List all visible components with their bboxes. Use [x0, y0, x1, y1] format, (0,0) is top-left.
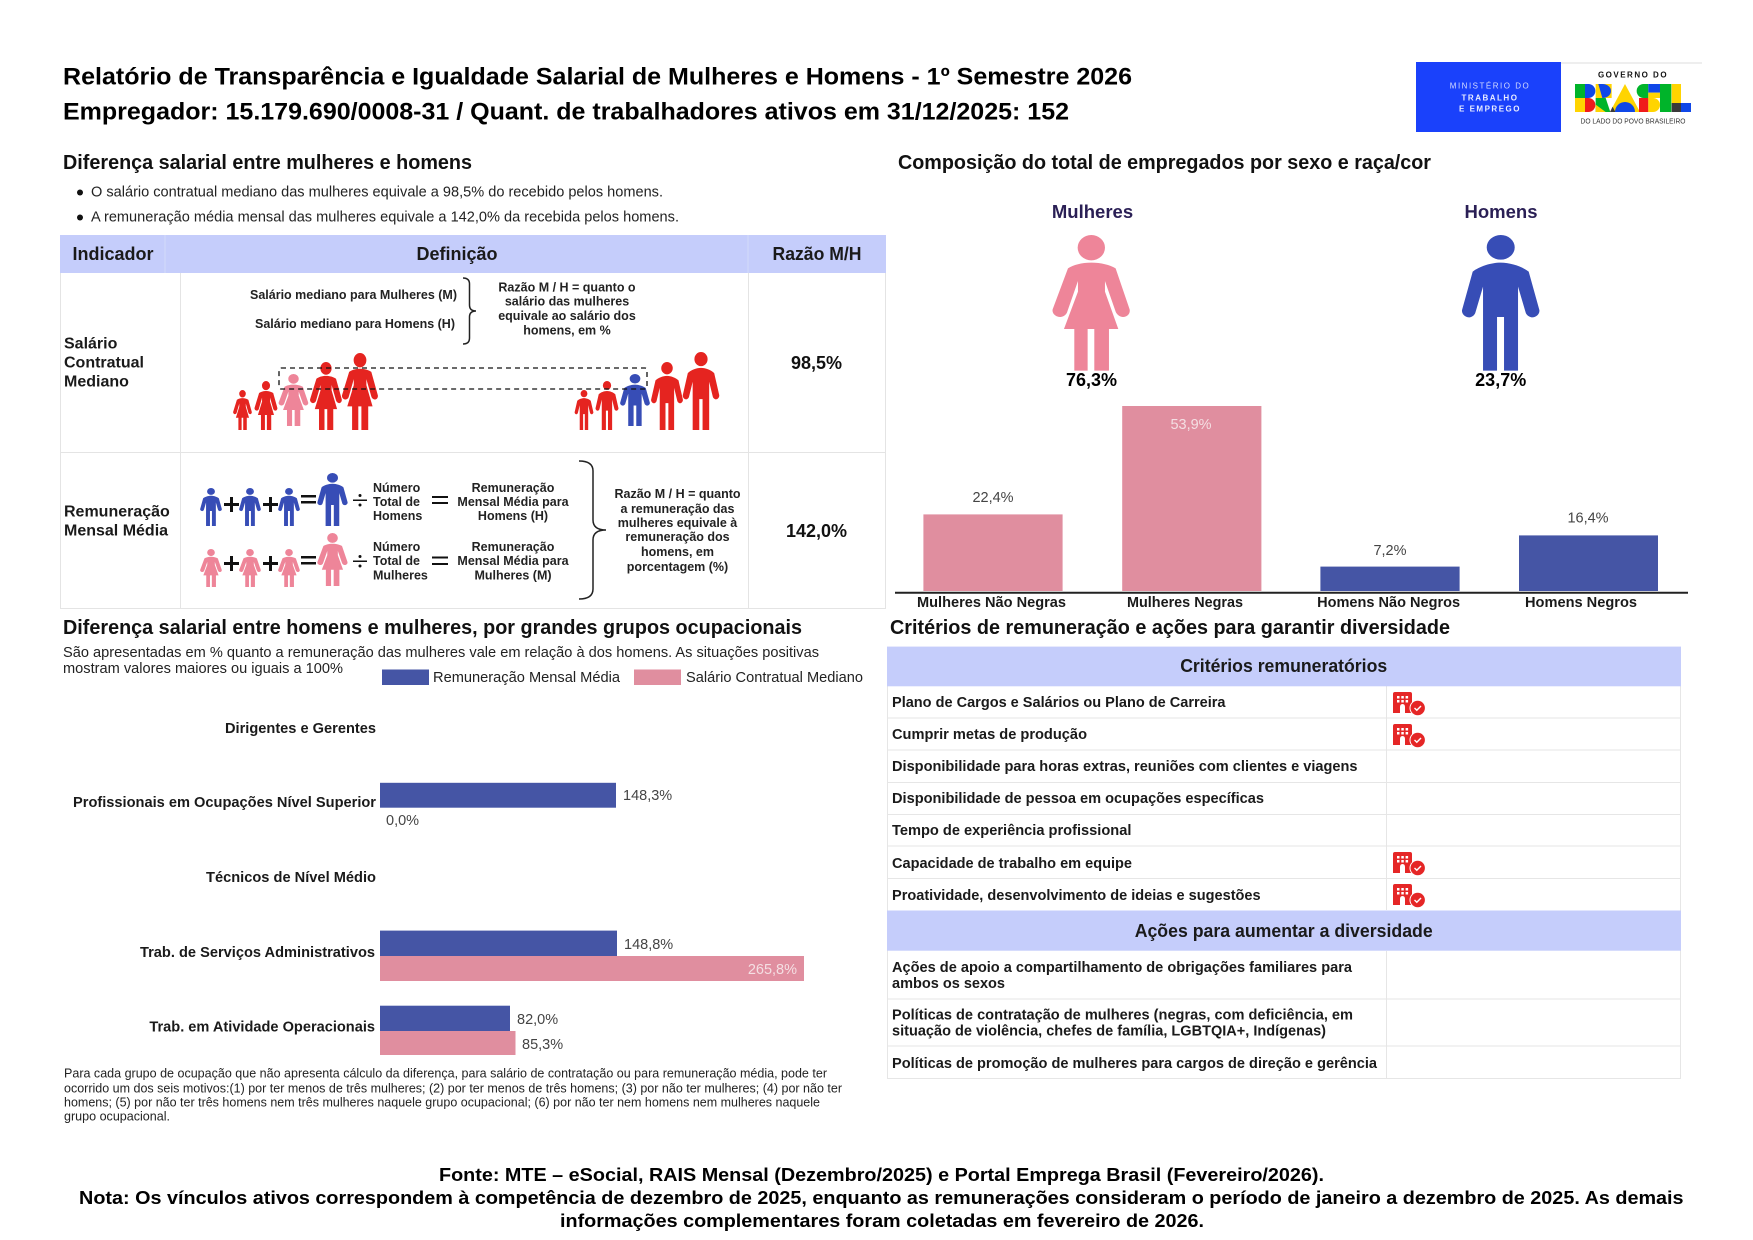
- category: profissionais: [73, 783, 672, 829]
- definition: men's pay formula: Homens: [373, 509, 422, 523]
- heading: occupational groups: Diferença salarial entre homens e mulheres, por grandes grupos ocupacionais: [63, 617, 802, 639]
- criteria rows: Proatividade, desenvolvimento de ideias e sugestões: [892, 888, 1261, 904]
- criteria rows: Disponibilidade de pessoa em ocupações específicas: [892, 791, 1264, 807]
- diversity action rows: Políticas de promoção de mulheres para cargos de direção e gerência: [892, 1056, 1378, 1072]
- criteria rows: Plano de Cargos e Salários ou Plano de Carreira: [892, 695, 1226, 711]
- panel: men share: 23,7%: [1475, 370, 1526, 390]
- definition: men's pay formula: [200, 473, 570, 526]
- brace: formulas to ratio: [579, 461, 606, 599]
- indicator label: salário contratual mediano: [64, 336, 144, 390]
- definition: salário mediano labels: Salário mediano para Homens (H): [255, 317, 455, 331]
- text block: salary summary bullets: [77, 184, 679, 226]
- indicator label: salário contratual mediano: Mediano: [64, 374, 129, 390]
- category: profissionais: Profissionais em Ocupações Nível Superior: [73, 795, 376, 811]
- heading: salary difference: Diferença salarial entre mulheres e homens: [63, 152, 472, 174]
- icon: five women ordered by salary: [233, 353, 378, 430]
- logo: ministry and government: GOVERNO DO: [1598, 70, 1668, 80]
- category: operacionais: 85,3%: [522, 1037, 563, 1053]
- category: operacionais: [149, 1006, 563, 1055]
- legend: [382, 670, 863, 686]
- title: Relatório de Transparência e Igualdade Salarial de Mulheres e Homens - 1º Semestre 2026: [63, 64, 1132, 90]
- panel: women share: 76,3%: [1066, 370, 1117, 390]
- panel: women share: [1052, 201, 1133, 390]
- legend: Salário Contratual Mediano: [686, 670, 863, 686]
- bar chart: occupational groups: [73, 721, 804, 1055]
- diversity action rows: situação de violência, chefes de família, LGBTQIA+, Indígenas): [892, 1023, 1326, 1039]
- value: remuneration ratio: 142,0%: [786, 521, 847, 541]
- definition: women's pay formula: Remuneração: [472, 540, 555, 554]
- text block: salary summary bullets: A remuneração média mensal das mulheres equivale a 142,0% da recebida pelos homens.: [91, 208, 679, 226]
- header: critérios remuneratórios: [887, 647, 1681, 686]
- criteria rows: Capacidade de trabalho em equipe: [892, 856, 1132, 872]
- category: administrativos: 148,8%: [624, 937, 673, 953]
- icon: company check, row 7: [1393, 884, 1426, 908]
- diversity action rows: Políticas de contratação de mulheres (negras, com deficiência, em: [892, 1007, 1353, 1023]
- definition: women's pay formula: Número: [373, 540, 421, 554]
- indicator label: remuneração mensal média: Mensal Média: [64, 522, 168, 540]
- text block: footnote on missing data: homens; (5) por não ter três homens nem três mulheres naquele grupo ocupacional; (6) por não ter nem homens nem mulheres naquele: [64, 1094, 820, 1110]
- text block: chart explanation: mostram valores maiores ou iguais a 100%: [63, 661, 343, 677]
- footer: source and note: Fonte: MTE – eSocial, RAIS Mensal (Dezembro/2025) e Portal Emprega Brasil (Fevereiro/2026).: [439, 1165, 1324, 1185]
- header: ações para aumentar a diversidade: Ações para aumentar a diversidade: [1135, 921, 1433, 941]
- definition: men's pay formula: Número: [373, 481, 421, 495]
- table header: Definição: [416, 244, 498, 264]
- definition: women's pay formula: Mensal Média para: [457, 554, 570, 568]
- table header: [60, 235, 886, 273]
- diversity action rows: Ações de apoio a compartilhamento de obrigações familiares para: [892, 960, 1353, 976]
- definition: razão explanation for remuneration: remuneração dos: [625, 530, 730, 544]
- definition: men's pay formula: Total de: [373, 495, 420, 509]
- indicator label: remuneração mensal média: Remuneração: [64, 504, 170, 520]
- footer: source and note: [79, 1165, 1684, 1231]
- definition: razão explanation for remuneration: a remuneração das: [621, 502, 735, 516]
- category: profissionais: 148,3%: [623, 788, 672, 804]
- definition: women's pay formula: Mulheres: [373, 568, 428, 582]
- category: administrativos: [140, 931, 804, 981]
- panel: indicator table: [60, 235, 886, 608]
- criteria rows: Cumprir metas de produção: [892, 727, 1087, 743]
- bar chart: composition by sex and race: Mulheres Não Negras: [917, 595, 1066, 611]
- title: [63, 64, 1132, 126]
- bar chart: composition by sex and race: 16,4%: [1567, 510, 1609, 526]
- definition: salário mediano labels: [250, 278, 476, 344]
- logo: ministry and government: E EMPREGO: [1459, 104, 1521, 114]
- value: salário ratio: 98,5%: [791, 353, 842, 373]
- panel: men share: [1462, 201, 1539, 390]
- bar chart: composition by sex and race: 53,9%: [1170, 417, 1212, 433]
- text block: footnote on missing data: Para cada grupo de ocupação que não apresenta cálculo da diferença, para salário de contratação ou para remuneração média, pode ter: [64, 1066, 828, 1080]
- table header: Razão M/H: [772, 244, 862, 264]
- bar chart: composition by sex and race: [895, 406, 1688, 611]
- footer: source and note: informações complementares foram coletadas em fevereiro de 2026.: [560, 1211, 1204, 1231]
- icon: five men ordered by salary: [575, 352, 719, 430]
- panel: women share: Mulheres: [1052, 201, 1133, 222]
- category: dirigentes: Dirigentes e Gerentes: [225, 721, 376, 737]
- criteria rows: [892, 695, 1358, 904]
- panel: criteria table: [887, 647, 1681, 1078]
- header: ações para aumentar a diversidade: [887, 910, 1681, 951]
- dashed comparison box: [279, 368, 647, 389]
- header: critérios remuneratórios: Critérios remuneratórios: [1180, 656, 1387, 676]
- indicator label: remuneração mensal média: [64, 504, 170, 540]
- table header: Indicador: [72, 244, 154, 264]
- text block: salary summary bullets: O salário contratual mediano das mulheres equivale a 98,5% do recebido pelos homens.: [91, 184, 663, 200]
- diversity action rows: [892, 960, 1378, 1072]
- text block: footnote on missing data: ocorrido um dos seis motivos:(1) por ter menos de três mulheres; (2) por ter menos de três homens; (3) por não ter mulheres; (4) por não ter: [64, 1080, 843, 1096]
- definition: women's pay formula: Total de: [373, 554, 420, 568]
- definition: razão explanation for remuneration: homens, em: [641, 545, 714, 559]
- logo: ministry and government: DO LADO DO POVO BRASILEIRO: [1580, 118, 1686, 126]
- logo: ministry and government: [1416, 62, 1702, 132]
- text block: chart explanation: São apresentadas em % quanto a remuneração das mulheres vale em relação à dos homens. As situações positivas: [63, 645, 819, 661]
- definition: men's pay formula: Homens (H): [478, 509, 548, 523]
- definition: women's pay formula: [200, 533, 570, 587]
- definition: razão explanation for remuneration: Razão M / H = quanto: [614, 487, 741, 501]
- heading: composition: Composição do total de empregados por sexo e raça/cor: [898, 152, 1431, 174]
- definition: salário mediano labels: Salário mediano para Mulheres (M): [250, 288, 457, 302]
- criteria rows: Disponibilidade para horas extras, reuniões com clientes e viagens: [892, 759, 1358, 775]
- indicator label: salário contratual mediano: Contratual: [64, 354, 144, 372]
- bar chart: composition by sex and race: 22,4%: [972, 490, 1014, 506]
- diversity action rows: ambos os sexos: [892, 976, 1005, 992]
- definition: razão explanation: [498, 280, 636, 338]
- icon: company check, row 2: [1393, 724, 1426, 748]
- definition: razão explanation for remuneration: porcentagem (%): [627, 560, 728, 574]
- text block: footnote on missing data: grupo ocupacional.: [64, 1108, 170, 1124]
- criteria rows: Tempo de experiência profissional: [892, 823, 1131, 839]
- definition: men's pay formula: Mensal Média para: [457, 495, 570, 509]
- definition: razão explanation: homens, em %: [523, 324, 611, 338]
- definition: razão explanation: equivale ao salário dos: [498, 309, 636, 323]
- panel: men share: Homens: [1464, 201, 1538, 222]
- indicator label: salário contratual mediano: Salário: [64, 336, 118, 352]
- category: administrativos: 265,8%: [748, 962, 797, 978]
- heading: criteria: Critérios de remuneração e ações para garantir diversidade: [890, 617, 1450, 639]
- category: administrativos: Trab. de Serviços Administrativos: [140, 945, 375, 961]
- definition: razão explanation: Razão M / H = quanto o: [498, 280, 636, 294]
- bar chart: composition by sex and race: Homens Negros: [1525, 595, 1637, 611]
- definition: women's pay formula: Mulheres (M): [474, 568, 552, 582]
- icon: company check, row 1: [1393, 692, 1426, 716]
- definition: razão explanation: salário das mulheres: [505, 294, 629, 308]
- category: operacionais: Trab. em Atividade Operacionais: [149, 1019, 375, 1035]
- footer: source and note: Nota: Os vínculos ativos correspondem à competência de dezembro de 2025, enquanto as remunerações consideram o período de janeiro a dezembro de 2025. As demais: [79, 1188, 1684, 1208]
- category: profissionais: 0,0%: [386, 813, 419, 829]
- text block: footnote on missing data: [64, 1066, 843, 1124]
- category: técnicos: Técnicos de Nível Médio: [206, 870, 376, 886]
- title: Empregador: 15.179.690/0008-31 / Quant. de trabalhadores ativos em 31/12/2025: 152: [63, 98, 1069, 126]
- logo: ministry and government: MINISTÉRIO DO: [1450, 82, 1530, 90]
- definition: razão explanation for remuneration: mulheres equivale à: [618, 516, 737, 530]
- icon: company check, row 6: [1393, 852, 1426, 876]
- legend: Remuneração Mensal Média: [433, 670, 621, 686]
- bar chart: composition by sex and race: Mulheres Negras: [1127, 595, 1243, 611]
- bar chart: composition by sex and race: 7,2%: [1373, 543, 1407, 559]
- definition: men's pay formula: Remuneração: [472, 481, 555, 495]
- category: operacionais: 82,0%: [517, 1012, 558, 1028]
- text block: chart explanation: [63, 645, 819, 677]
- definition: razão explanation for remuneration: [614, 487, 741, 574]
- bar chart: composition by sex and race: Homens Não Negros: [1317, 595, 1460, 611]
- logo: ministry and government: TRABALHO: [1462, 94, 1518, 102]
